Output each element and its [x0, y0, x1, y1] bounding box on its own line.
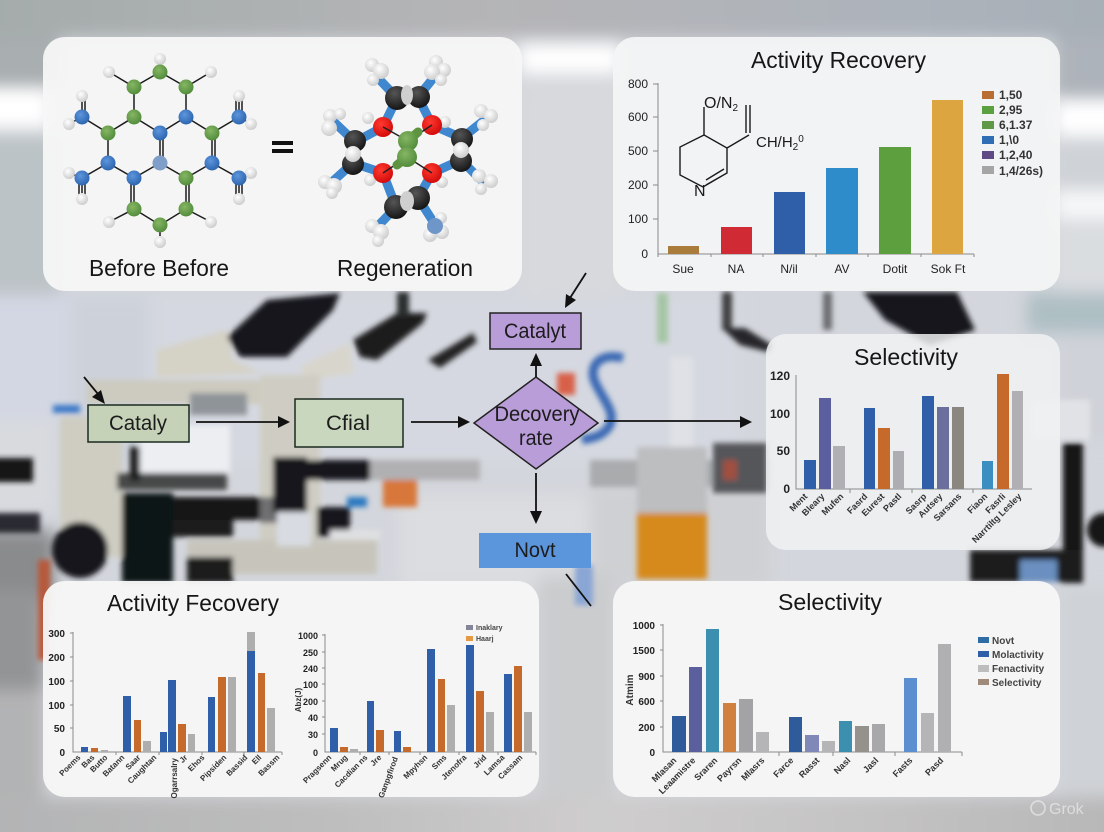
right microscope — [722, 292, 732, 330]
bar chart left: Saar — [124, 753, 142, 772]
bar chart: Eurest — [860, 491, 886, 518]
heading: Activity Fecovery — [107, 590, 279, 616]
chemical structure: 2 — [732, 103, 738, 114]
legend: 1,\0 — [999, 133, 1019, 147]
bar chart right: Cassam — [496, 753, 524, 781]
chemical structure: 2 — [793, 142, 799, 153]
bar chart right: 40 — [308, 713, 318, 723]
molecule: before — [63, 53, 257, 248]
bar chart: Sraren — [692, 755, 719, 783]
bar chart right: Jre — [369, 753, 384, 768]
legend: 1,4/26s) — [999, 164, 1043, 178]
bar chart: Narrtiltg Lesley — [970, 491, 1023, 545]
bar chart left: Butto — [88, 753, 109, 774]
bar chart right: Mrug — [329, 753, 349, 773]
bar chart left: Jr — [178, 753, 189, 765]
label: regeneration: Regeneration — [337, 255, 473, 281]
watermark: Grok — [1049, 801, 1085, 818]
bar chart: 50 — [777, 444, 790, 458]
bar chart left: 100 — [48, 677, 65, 688]
bar chart left: 100 — [48, 701, 65, 712]
bar chart: 0 — [649, 748, 655, 759]
heading: Activity Recovery — [751, 47, 926, 73]
bar chart: Bleary — [800, 491, 826, 518]
bar chart left: Ogarrsalry — [170, 757, 179, 798]
flow diamond: decovery rate: rate — [519, 427, 553, 450]
arrow diamond to Catalyt — [530, 353, 542, 377]
bar chart: Rasst — [797, 755, 821, 780]
watermark — [1031, 801, 1085, 818]
legend — [466, 625, 503, 643]
bar chart left: Bas — [80, 753, 97, 770]
bench and flask right — [590, 460, 770, 487]
flow box: Cataly: Cataly — [109, 412, 167, 435]
bar chart left: 200 — [48, 653, 65, 664]
arrow into Cataly — [84, 377, 105, 404]
bar chart — [628, 77, 974, 276]
flow box: Catalyt — [490, 313, 581, 349]
bar chart left: 300 — [48, 629, 65, 640]
bar chart: Sarsans — [932, 491, 963, 523]
bar chart: 600 — [628, 110, 648, 124]
flow box: Cfial — [295, 399, 403, 447]
flow diamond: decovery rate — [474, 377, 598, 469]
legend — [978, 636, 1045, 689]
bar chart: N/il — [780, 262, 798, 276]
arrow diamond to Novt — [530, 473, 542, 524]
bar chart left: Bassid — [224, 753, 249, 778]
bar chart right: 30 — [308, 730, 318, 740]
bar chart left: Ell — [250, 753, 263, 766]
legend: Molactivity — [992, 650, 1044, 661]
legend: 2,95 — [999, 103, 1023, 117]
bar chart: 200 — [628, 178, 648, 192]
bar chart right: 1000 — [298, 631, 318, 641]
bar chart right: Jrid — [472, 753, 488, 770]
bar chart: Nasl — [832, 755, 852, 776]
bar chart: Mufen — [820, 491, 845, 517]
bar chart: Fasts — [891, 755, 914, 779]
bar chart: Fiaon — [965, 491, 989, 515]
chemical structure — [680, 95, 804, 200]
panel: selectivity bottom — [613, 581, 1060, 797]
bar chart left — [48, 629, 282, 798]
bar chart left: Poems — [57, 753, 83, 778]
bar chart: AV — [834, 262, 850, 276]
legend: Novt — [992, 636, 1015, 647]
molecule: after — [318, 55, 498, 247]
bar chart left: Pipsiden — [198, 753, 228, 783]
bar chart right: Jtenofra — [440, 753, 469, 782]
legend: 1,2,40 — [999, 148, 1033, 162]
bar chart: 1000 — [633, 621, 655, 632]
bar chart: 120 — [770, 369, 790, 383]
bar chart right: 100 — [303, 680, 318, 690]
flow diamond: decovery rate: Decovery — [494, 403, 580, 426]
bar chart: Mlasan — [650, 755, 678, 784]
bar chart right: Pragsenn — [301, 753, 333, 785]
bar chart: Jasl — [861, 755, 880, 775]
equals sign — [272, 141, 293, 153]
bar chart: Sok Ft — [931, 262, 966, 276]
bar chart left: Bassm — [256, 753, 281, 778]
bar chart right: Abz(J) — [294, 687, 303, 712]
bar chart left: Batann — [101, 753, 126, 779]
bar chart: 800 — [628, 77, 648, 91]
bar chart: NA — [728, 262, 744, 276]
microscopes left — [157, 330, 260, 377]
bar chart: Dotit — [883, 262, 908, 276]
panel: molecules before and after regeneration — [43, 37, 522, 291]
bar chart — [770, 369, 1032, 545]
bar chart: 100 — [770, 407, 790, 421]
bar chart left: Caughtan — [126, 753, 158, 785]
heading: Selectivity — [854, 344, 958, 370]
flow box: Novt — [479, 533, 591, 568]
bar chart: Payrsn — [715, 755, 743, 784]
arrow Cataly to Cfial — [196, 416, 290, 428]
bar chart right: Mpyhsn — [402, 753, 429, 781]
bar chart: 1500 — [633, 646, 655, 657]
bar chart: Mlasrs — [739, 755, 766, 783]
bar chart: Autsey — [916, 491, 944, 520]
bar chart right: 240 — [303, 664, 318, 674]
panel: selectivity right — [766, 334, 1060, 550]
bar chart left: 0 — [59, 748, 65, 759]
bar chart: 0 — [783, 482, 790, 496]
chemical structure: O/N — [704, 95, 732, 112]
bar chart: Atmim — [625, 674, 636, 706]
bar chart right: 250 — [303, 648, 318, 658]
legend: Selectivity — [992, 678, 1042, 689]
arrow into Catalyt — [565, 273, 586, 308]
chemical structure: CH/H — [756, 134, 793, 151]
arrow diamond to selectivity — [604, 416, 752, 428]
flow box: Cfial: Cfial — [326, 412, 370, 435]
flow box: Cataly — [88, 405, 189, 442]
legend — [982, 88, 1043, 178]
connector line below Novt — [566, 574, 591, 606]
bar chart: Fasrd — [845, 491, 869, 516]
bar chart right — [294, 625, 536, 799]
bar chart right: 0 — [313, 748, 318, 758]
bar chart: 500 — [628, 144, 648, 158]
chemical structure: 0 — [798, 134, 804, 145]
bar chart: Pasd — [923, 755, 945, 778]
bar chart left: 50 — [54, 724, 65, 735]
bar chart: 900 — [638, 672, 655, 683]
bar chart: 0 — [641, 247, 648, 261]
bar chart right: Lamsa — [482, 753, 507, 777]
bar chart: 600 — [638, 697, 655, 708]
panel: activity recovery bottom — [43, 581, 539, 799]
bar chart right: Cacdian ns — [333, 753, 370, 790]
panel: activity recovery top — [613, 37, 1060, 291]
flow box: Catalyt: Catalyt — [504, 320, 566, 343]
bar chart — [625, 621, 962, 796]
bar chart right: 200 — [303, 697, 318, 707]
bar chart left: Ehos — [186, 753, 207, 773]
bar chart: Fasrli — [983, 491, 1007, 515]
bar chart: 100 — [628, 212, 648, 226]
label: before: Before Before — [89, 255, 229, 281]
legend: Fenactivity — [992, 664, 1045, 675]
bar chart: Leaamistre — [657, 755, 697, 796]
legend: 6,1.37 — [999, 118, 1033, 132]
bar chart: Sasrp — [904, 491, 929, 516]
bar chart right: Sms — [430, 753, 449, 771]
flow box: Novt: Novt — [514, 539, 556, 562]
legend: Haarj — [476, 636, 494, 643]
bar chart: Sue — [672, 262, 694, 276]
bar chart: 200 — [638, 723, 655, 734]
bar chart right: Ganpgfirod — [377, 756, 400, 799]
bar chart: Ment — [787, 491, 809, 513]
legend: Inaklary — [476, 625, 503, 632]
arrow Cfial to diamond — [411, 416, 470, 428]
bar chart: Farce — [771, 755, 795, 779]
chemical structure: N — [694, 183, 706, 200]
bar chart: Pastl — [881, 491, 903, 514]
heading: Selectivity — [778, 589, 882, 615]
legend: 1,50 — [999, 88, 1023, 102]
